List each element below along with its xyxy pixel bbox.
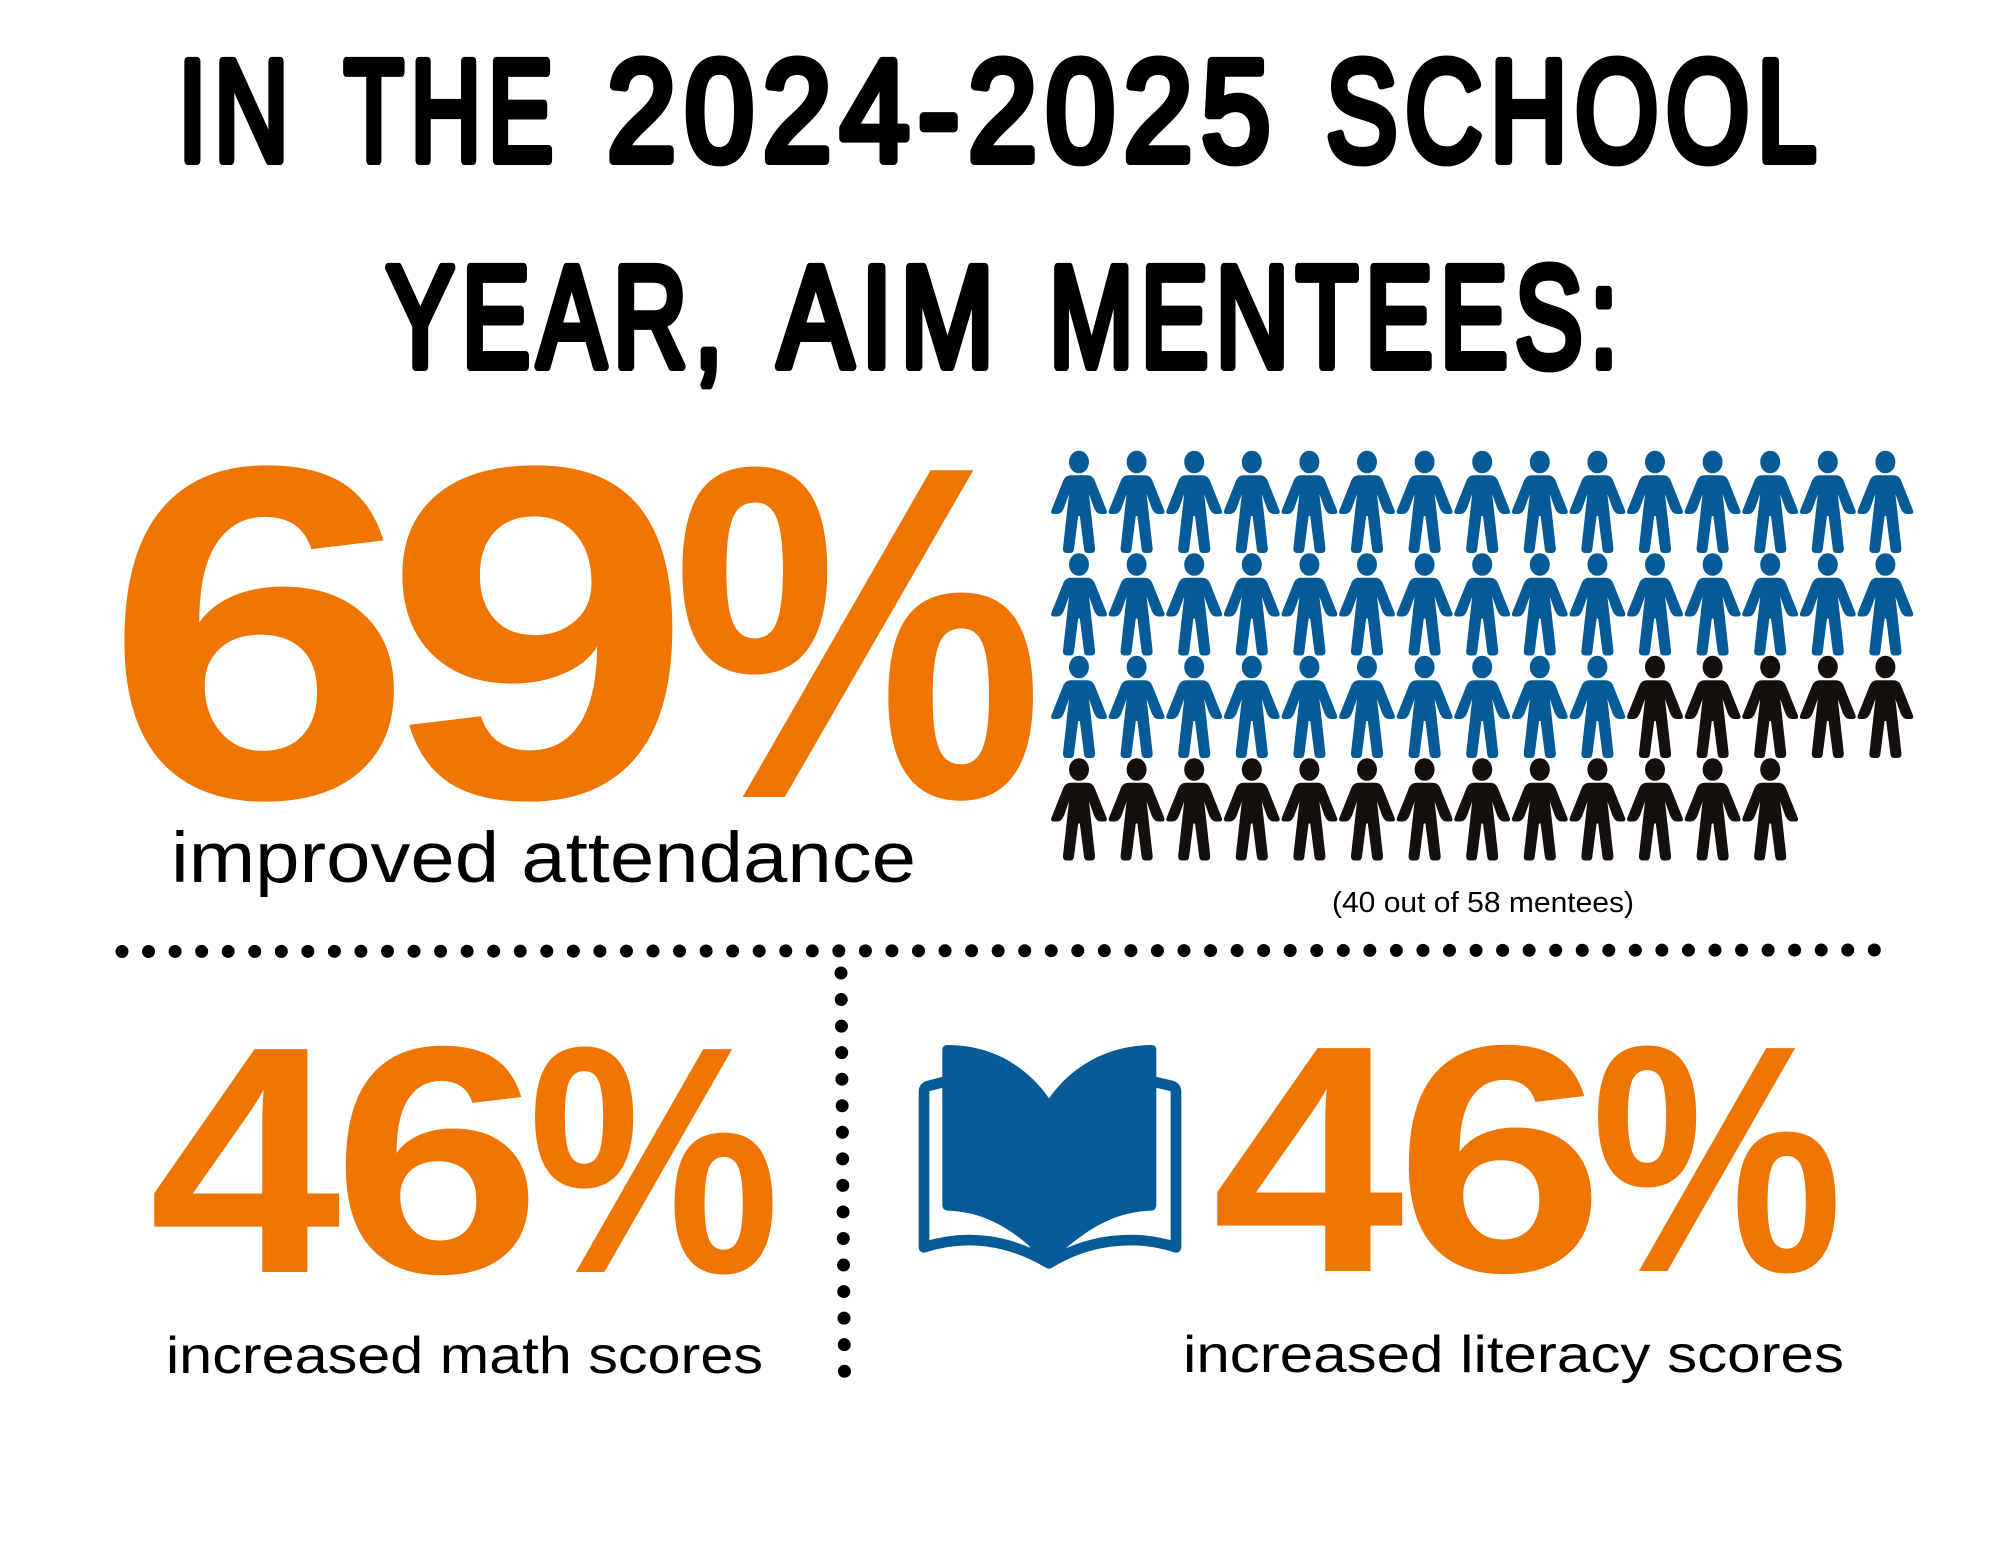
title line 2 [386, 236, 1625, 398]
stat: 46 percent literacy [1212, 978, 1843, 1340]
title line 2: YEAR, [386, 236, 730, 398]
caption: increased literacy scores: increased literacy scores [1183, 1326, 1844, 1384]
caption: improved attendance: improved attendance [171, 819, 916, 898]
stat: 46 percent literacy: 4 [1212, 978, 1406, 1340]
title line 1: IN [178, 30, 296, 192]
title [178, 30, 1824, 398]
title line 2: AIM [778, 236, 1002, 398]
caption: 40 out of 58 mentees: (40 out of 58 mentees) [1332, 887, 1634, 919]
stat: 69 percent: 6 [104, 367, 414, 898]
pictogram: 40 of 58 mentees [1051, 451, 1913, 860]
title line 1 [178, 30, 1824, 192]
title line 1: SCHOOL [1326, 30, 1824, 192]
stat: 69 percent: % [672, 367, 1044, 898]
stat: 46 percent math [149, 979, 780, 1341]
blue figures: 40 improved [1051, 451, 1913, 758]
stat: 69 percent [104, 367, 1044, 898]
stat: 46 percent literacy: % [1591, 978, 1843, 1340]
title line 1: 2024-2025 [607, 30, 1279, 192]
black figures: 18 not improved [1051, 656, 1913, 860]
title line 2: MENTEES: [1049, 236, 1625, 398]
icon: open book [924, 1045, 1176, 1267]
stat: 46 percent math: % [528, 979, 780, 1341]
stat: 46 percent math: 4 [149, 979, 343, 1341]
caption: increased math scores: increased math scores [166, 1327, 763, 1385]
stat: 69 percent: 9 [383, 367, 693, 898]
stat: 46 percent math: 6 [332, 979, 542, 1341]
stat: 46 percent literacy: 6 [1395, 978, 1605, 1340]
title line 1: THE [344, 30, 560, 192]
